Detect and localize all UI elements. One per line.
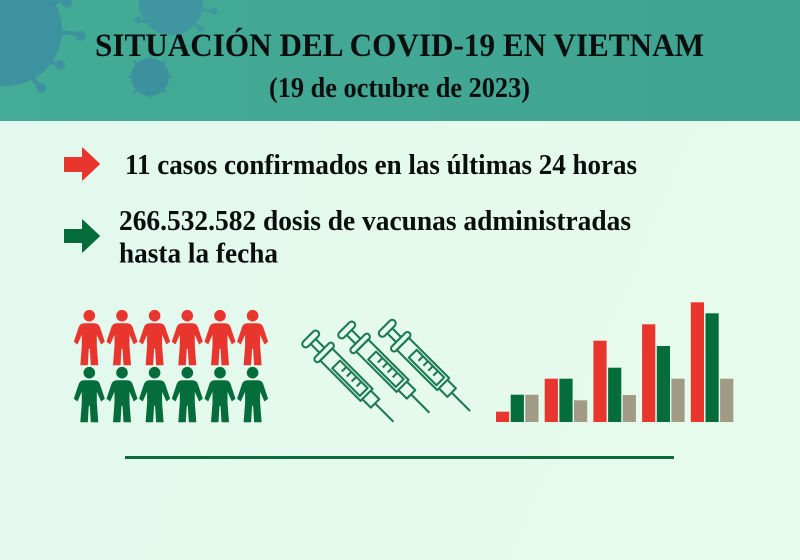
- icon: syringes: [299, 317, 479, 431]
- icon: green people row: [74, 367, 268, 422]
- text: vaccine doses: 266.532.582 dosis de vacunas administradas: [119, 205, 631, 237]
- icon: medium virus: [134, 0, 218, 35]
- icon: red arrow: [64, 148, 100, 180]
- bar chart: [496, 302, 733, 422]
- text: vaccine doses: [119, 205, 631, 270]
- text: vaccine doses: hasta la fecha: [119, 238, 278, 270]
- icon: red people row: [74, 310, 268, 365]
- icon: large virus: [0, 0, 86, 93]
- text: confirmed cases: 11 casos confirmados en las últimas 24 horas: [125, 149, 637, 181]
- title: SITUACIÓN DEL COVID-19 EN VIETNAM: [95, 26, 704, 64]
- divider line: [125, 456, 674, 459]
- icon: small virus: [128, 55, 172, 99]
- subtitle: date: (19 de octubre de 2023): [269, 73, 530, 104]
- header band: [0, 0, 800, 121]
- icon: green arrow: [64, 220, 100, 252]
